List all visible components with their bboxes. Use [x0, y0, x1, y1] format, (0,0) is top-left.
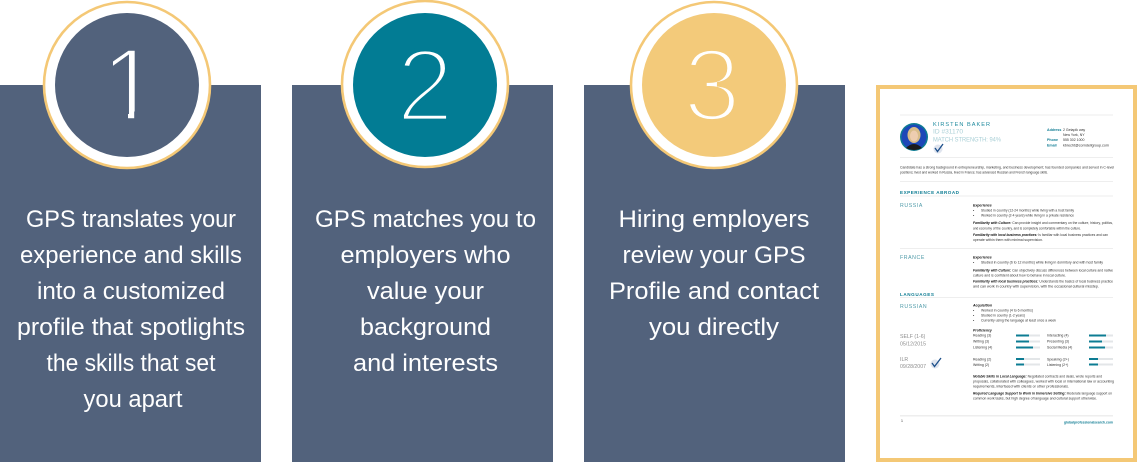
language notes: proposals, collaborated with colleagues, worked with local or international law or accounting — [973, 380, 1114, 384]
step 1 text: the skills that set — [46, 350, 216, 377]
section: languages — [900, 292, 1114, 400]
step 1 text — [17, 206, 245, 413]
section: experience abroad: Studied in country (12-24 months) while living with a host family — [981, 208, 1074, 212]
section: experience abroad: Experience — [973, 204, 992, 208]
panel: step 2 — [292, 1, 553, 462]
step 1 text: you apart — [84, 386, 183, 413]
proficiency bars — [973, 334, 1113, 367]
section: languages: SELF (1-6) — [900, 334, 926, 340]
contact details: kbrecht@corndellgroup.com — [1063, 144, 1109, 148]
step 2 text: value your — [367, 278, 484, 305]
step 1 text: experience and skills — [20, 242, 242, 269]
section: experience abroad: FRANCE — [900, 255, 925, 261]
language notes: requirements, interfaced with clients or other professionals. — [973, 384, 1069, 388]
profile summary — [900, 166, 1114, 182]
contact details: 555 302 1000 — [1063, 138, 1084, 142]
section: languages: RUSSIAN — [900, 304, 927, 310]
section: experience abroad: Familiarity with local business practices: Is familiar with local business practices and can — [973, 233, 1108, 237]
section: languages: Studied in country (1-2 years) — [981, 314, 1025, 318]
section: experience abroad: culture and is confident about how to behave in local culture. — [973, 274, 1066, 278]
proficiency bars: Listening (4) — [973, 346, 992, 350]
section: experience abroad: operate within them with minimal supervision. — [973, 238, 1043, 242]
language notes: Required Language Support to Work in Immersive Setting: Moderate language support on — [973, 392, 1112, 396]
step 1 text: GPS translates your — [26, 206, 236, 233]
section: languages: LANGUAGES — [900, 292, 934, 297]
profile header: ID #31170 — [933, 128, 964, 136]
proficiency bars: Reading (2) — [973, 358, 991, 362]
section: experience abroad: EXPERIENCE ABROAD — [900, 190, 960, 195]
step 3 text: you directly — [649, 314, 779, 341]
step 1 text: into a customized — [37, 278, 225, 305]
contact details: New York, NY — [1063, 133, 1085, 137]
step 2 text: GPS matches you to — [315, 206, 536, 233]
profile content — [900, 114, 1114, 424]
section: experience abroad: and economy of the country, and is completely comfortable within the culture. — [973, 226, 1081, 230]
proficiency bars: Reading (3) — [973, 334, 991, 338]
language notes — [973, 374, 1114, 400]
step 3 number badge: 3 — [683, 28, 741, 142]
section: experience abroad: Experience — [973, 256, 992, 260]
step 3 number badge — [631, 2, 797, 168]
section: experience abroad: Studied in country (6 to 12 months) while living in dormitory and with host family — [981, 260, 1103, 264]
profile footer: 1 — [901, 419, 903, 423]
step 3 text: Hiring employers — [618, 206, 810, 233]
section: experience abroad — [900, 190, 1113, 288]
profile summary: Candidate has a strong background in entrepreneurship, marketing, and business development; has founded companies and served in C-level — [900, 166, 1114, 170]
section: languages: Acquisition — [972, 304, 992, 308]
section: experience abroad: Familiarity with local business practices: Understands the basics of local business practice — [973, 280, 1113, 284]
section: experience abroad: Worked in country (2-4 years) while living in a private residence — [981, 214, 1074, 218]
profile header: KIRSTEN BAKER — [933, 122, 990, 128]
panel: step 3 — [584, 2, 845, 462]
step 1 text: profile that spotlights — [17, 314, 245, 341]
proficiency bars: Listening (2+) — [1047, 363, 1068, 367]
step 1 number badge — [44, 2, 210, 168]
profile footer — [900, 415, 1113, 424]
section: languages: Worked in country (4 to 6 months) — [981, 308, 1033, 312]
proficiency bars: Speaking (2+) — [1047, 358, 1069, 362]
verified check icon — [934, 144, 943, 154]
section: languages: Currently using the language at least once a week — [981, 318, 1056, 322]
profile header — [900, 114, 1113, 158]
step 1 number badge: 1 — [101, 27, 159, 142]
section: experience abroad: Familiarity with Culture: Can objectively discuss differences between local culture and native — [973, 268, 1113, 272]
profile footer: globalprofessionalsearch.com — [1064, 420, 1113, 424]
step 2 text: and interests — [353, 350, 498, 377]
section: experience abroad: • — [973, 208, 975, 212]
step 2 text: employers who — [340, 242, 510, 269]
language notes: common work tasks, but high degree of language and cultural support otherwise. — [973, 396, 1097, 400]
section: languages: Proficiency — [973, 328, 993, 332]
contact details: Phone — [1047, 138, 1058, 142]
section: experience abroad: • — [973, 214, 975, 218]
contact details: 2 Getapik way — [1063, 128, 1085, 132]
proficiency bars: Interacting (4) — [1047, 334, 1069, 338]
profile summary: positions; lived and worked in Russia, lived in France; has advanced Russian and French language skills. — [900, 170, 1048, 174]
section: languages: • — [973, 318, 975, 322]
language notes: Notable Skills in Local Language: Negotiated contracts and deals, wrote reports and — [973, 374, 1102, 378]
step 2 text — [315, 206, 536, 377]
proficiency bars: Writing (2) — [973, 363, 989, 367]
section: experience abroad: RUSSIA — [900, 203, 923, 209]
step 3 text: review your GPS — [622, 242, 806, 269]
proficiency bars: Writing (3) — [973, 340, 989, 344]
section: languages: ILR — [900, 357, 908, 363]
panel: sample GPS profile — [878, 87, 1135, 460]
proficiency bars: Social Media (4) — [1047, 346, 1072, 350]
ILR verified check icon — [930, 358, 941, 368]
contact details: Address — [1047, 128, 1061, 132]
section: experience abroad: and can work in country with supervision, with the occasional cultural misstep. — [973, 284, 1099, 288]
contact details: Email — [1047, 144, 1057, 148]
step 3 text — [609, 206, 819, 341]
section: experience abroad: • — [973, 260, 975, 264]
profile header: MATCH STRENGTH: 94% — [933, 136, 1001, 144]
profile photo — [900, 123, 928, 151]
step 2 number badge — [342, 1, 508, 167]
proficiency bars: Presenting (3) — [1047, 340, 1069, 344]
section: languages: 09/28/2007 — [900, 364, 926, 370]
section: languages: • — [973, 314, 975, 318]
step 2 number badge: 2 — [396, 28, 454, 143]
section: experience abroad: Familiarity with Culture: Can provide insight and commentary on the culture, history, politics, — [973, 221, 1113, 225]
step 2 text: background — [360, 314, 491, 341]
panel: step 1 — [0, 2, 261, 462]
section: languages: • — [973, 308, 975, 312]
step 3 text: Profile and contact — [609, 278, 819, 305]
contact details — [1047, 128, 1109, 148]
section: languages: 05/12/2015 — [900, 342, 926, 348]
